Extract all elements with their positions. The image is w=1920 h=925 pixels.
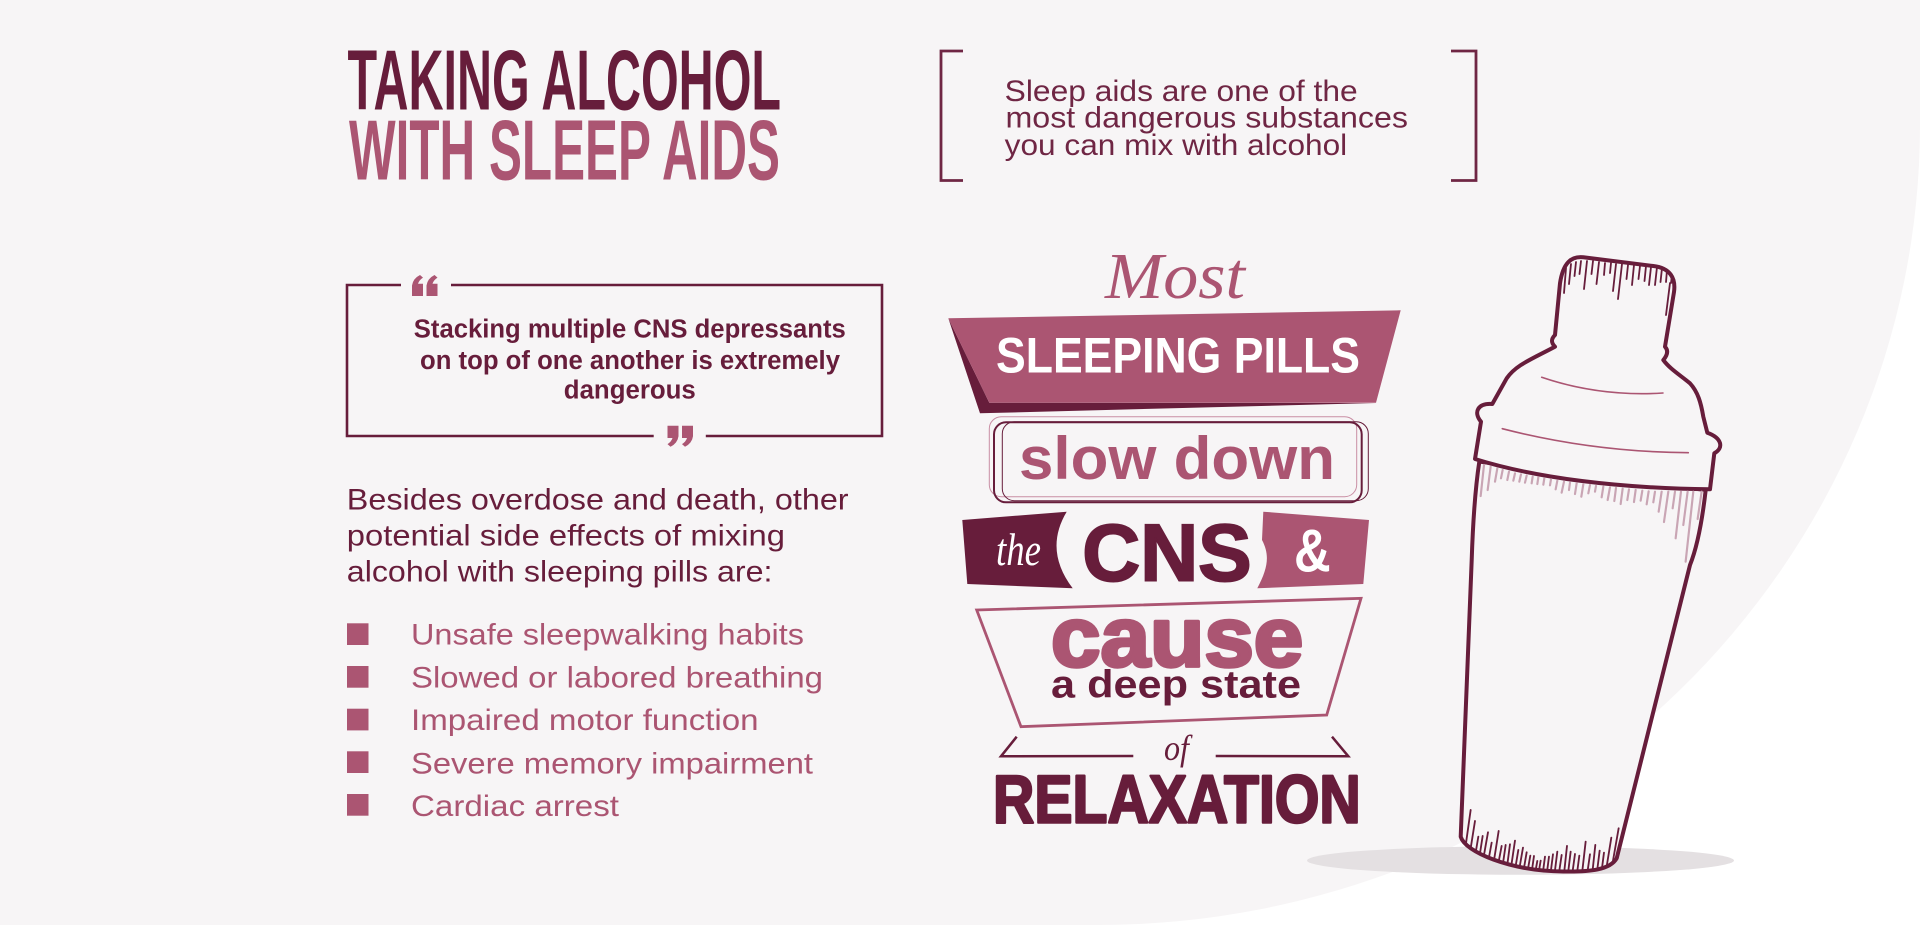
side effects list: Impaired motor function: [411, 704, 759, 737]
icon: closing quotation mark: [668, 426, 693, 447]
block: ampersand: &: [1294, 518, 1331, 585]
title: WITH SLEEP AIDS: [349, 103, 780, 198]
intro paragraph: [347, 483, 849, 588]
side effects list: [347, 618, 823, 823]
bracketed statement: most dangerous substances: [1006, 102, 1408, 135]
icon: cocktail shaker: [1461, 257, 1720, 872]
quote text: on top of one another is extremely: [420, 347, 841, 375]
word: Most: Most: [1104, 240, 1247, 313]
word: CNS: CNS: [1082, 509, 1252, 599]
lid hatching: [1564, 261, 1672, 315]
side effects list: Severe memory impairment: [411, 747, 813, 780]
title: TAKING ALCOHOL: [348, 33, 781, 128]
lid highlight lines: [1502, 377, 1688, 453]
intro paragraph: potential side effects of mixing: [347, 519, 785, 552]
box: cause a deep state: cause: [1051, 590, 1303, 684]
bracketed statement: Sleep aids are one of the: [1005, 75, 1358, 108]
shaker body: [1461, 462, 1706, 872]
intro paragraph: alcohol with sleeping pills are:: [347, 555, 772, 588]
intro paragraph: Besides overdose and death, other: [347, 483, 849, 516]
block: the: the: [996, 524, 1041, 575]
quote text: dangerous: [564, 376, 696, 404]
bracketed statement: [941, 51, 1476, 180]
banner: sleeping pills: SLEEPING PILLS: [996, 328, 1360, 384]
block: ampersand: [1257, 512, 1369, 588]
side effects list: Cardiac arrest: [411, 790, 619, 823]
word: relaxation: RELAXATION: [993, 762, 1361, 837]
block: the: [962, 512, 1073, 588]
bracketed statement: you can mix with alcohol: [1005, 129, 1347, 162]
shaker shadow: [1307, 846, 1734, 875]
side effects list: Slowed or labored breathing: [411, 661, 823, 694]
shaker lid: [1475, 257, 1720, 489]
side effects list: Unsafe sleepwalking habits: [411, 618, 804, 651]
box: slow down: slow down: [1019, 425, 1335, 492]
rim hatching: [1481, 465, 1702, 562]
quote text: [414, 316, 846, 404]
typographic stack: most sleeping pills slow down the CNS and cause a deep state of relaxation: [948, 240, 1401, 837]
banner: sleeping pills: [948, 310, 1401, 413]
box: slow down: [989, 417, 1368, 502]
base hatching: [1466, 810, 1619, 871]
title: [348, 33, 781, 198]
box: cause a deep state: [977, 590, 1361, 727]
box: cause a deep state: a deep state: [1051, 664, 1301, 707]
quote box: [347, 275, 882, 447]
divider: of: of: [1164, 728, 1193, 768]
quote text: Stacking multiple CNS depressants: [414, 316, 846, 344]
divider: of: [1001, 728, 1348, 768]
icon: opening quotation mark: [412, 275, 438, 296]
